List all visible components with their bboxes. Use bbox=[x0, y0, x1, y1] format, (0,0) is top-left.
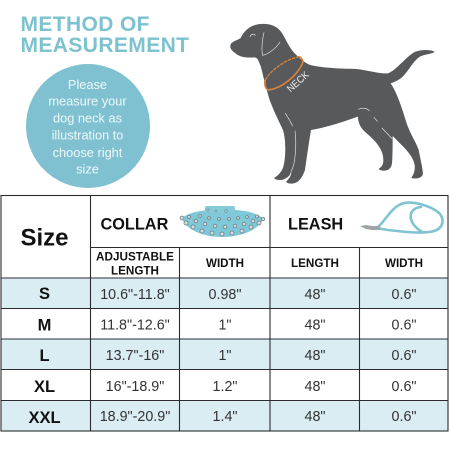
table values: 1.2" bbox=[213, 379, 237, 395]
size labels: M bbox=[38, 316, 51, 334]
table values: 0.98" bbox=[209, 287, 241, 303]
callout: measuring instruction circle: illustration to bbox=[52, 128, 123, 142]
title: METHOD OF bbox=[20, 13, 150, 36]
collar sub-headings: LENGTH bbox=[291, 258, 339, 270]
table values: 0.6" bbox=[392, 348, 416, 364]
callout: measuring instruction circle: size bbox=[76, 162, 99, 176]
neck label: NECK bbox=[285, 70, 312, 95]
neck measuring loop bbox=[265, 57, 303, 90]
collar sub-headings: LENGTH bbox=[111, 266, 159, 278]
table grid bbox=[1, 196, 448, 431]
title: MEASUREMENT bbox=[20, 34, 189, 57]
table values: 0.6" bbox=[392, 409, 416, 425]
callout: measuring instruction circle bbox=[26, 64, 150, 188]
table values bbox=[100, 287, 416, 425]
callout: measuring instruction circle: measure your bbox=[48, 94, 127, 108]
size labels bbox=[28, 285, 61, 427]
table values: 48" bbox=[305, 379, 325, 395]
table values: 0.6" bbox=[392, 379, 416, 395]
table values: 48" bbox=[305, 348, 325, 364]
illustration: dog with neck measurement bbox=[230, 24, 435, 184]
table values: 48" bbox=[305, 318, 325, 334]
callout: measuring instruction circle: dog neck as bbox=[53, 110, 122, 126]
icon: blue leash bbox=[360, 203, 443, 233]
leash heading: LEASH bbox=[288, 216, 343, 234]
size column heading: Size bbox=[20, 224, 69, 252]
table values: 10.6"-11.8" bbox=[100, 287, 170, 303]
collar heading: COLLAR bbox=[100, 216, 169, 234]
collar sub-headings: WIDTH bbox=[385, 258, 423, 270]
size labels: S bbox=[39, 285, 50, 303]
table values: 11.8"-12.6" bbox=[100, 318, 170, 334]
dog detail lines bbox=[250, 33, 392, 175]
icon: studded blue collar bbox=[180, 206, 265, 237]
size labels: L bbox=[39, 347, 50, 365]
title bbox=[20, 13, 189, 57]
collar sub-headings: WIDTH bbox=[206, 258, 244, 270]
table values: 0.6" bbox=[392, 318, 416, 334]
table values: 1" bbox=[218, 348, 232, 364]
collar sub-headings: ADJUSTABLE bbox=[96, 252, 174, 264]
collar sub-headings bbox=[96, 252, 423, 278]
table values: 0.6" bbox=[392, 287, 416, 303]
table values: 1" bbox=[218, 318, 232, 334]
table values: 48" bbox=[305, 287, 325, 303]
table values: 13.7"-16" bbox=[106, 348, 164, 364]
size labels: XXL bbox=[28, 409, 61, 427]
table values: 18.9"-20.9" bbox=[100, 409, 170, 425]
callout: measuring instruction circle: Please bbox=[68, 77, 107, 92]
table values: 48" bbox=[305, 409, 325, 425]
table values: 1.4" bbox=[213, 409, 237, 425]
size table bbox=[1, 196, 448, 431]
table row shading bbox=[1, 278, 448, 431]
table values: 16"-18.9" bbox=[106, 379, 164, 395]
callout: measuring instruction circle: choose right bbox=[53, 145, 123, 160]
size labels: XL bbox=[34, 378, 55, 396]
